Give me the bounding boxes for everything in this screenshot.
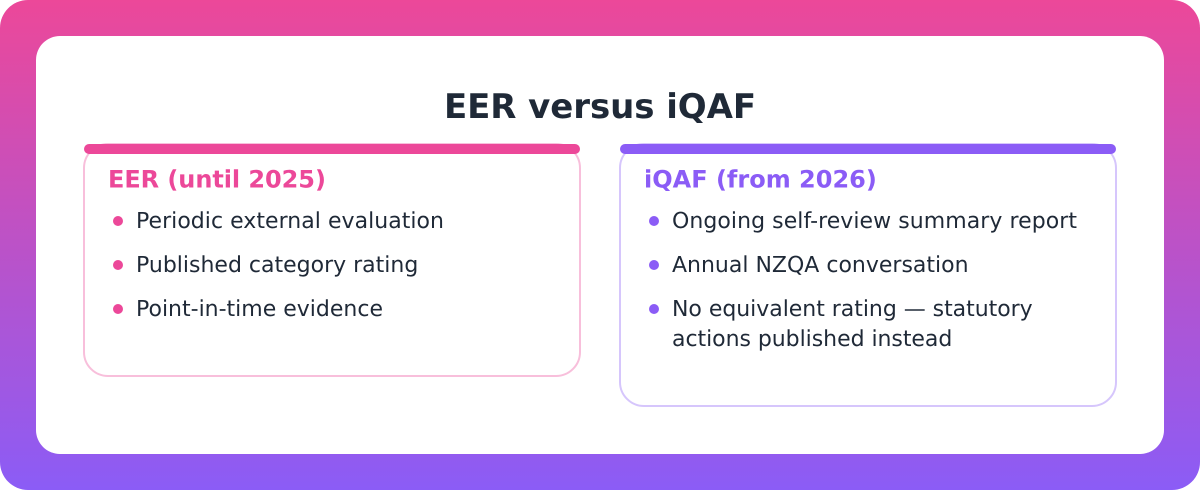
top accent bar (84, 144, 580, 154)
bullet: no equivalent rating (649, 297, 1033, 352)
bullet: point-in-time evidence: Point-in-time evidence (136, 297, 383, 322)
heading: iQAF: iQAF (from 2026) (644, 166, 877, 194)
top accent bar (620, 144, 1116, 154)
card outline (620, 144, 1116, 406)
heading: EER: EER (until 2025) (108, 166, 326, 194)
bullet: self-review report: Ongoing self-review summary report (672, 209, 1077, 234)
panel: iQAF (620, 144, 1116, 406)
bullet: periodic evaluation: Periodic external evaluation (136, 209, 444, 234)
title: EER versus iQAF (444, 87, 756, 127)
card outline (84, 144, 580, 376)
bullet: no equivalent rating: actions published instead (672, 327, 952, 352)
bullet: no equivalent rating: No equivalent rating — statutory (672, 297, 1033, 322)
panel: EER (84, 144, 580, 376)
bullet: NZQA conversation: Annual NZQA conversation (672, 253, 969, 278)
bullet: category rating: Published category rating (136, 253, 418, 278)
